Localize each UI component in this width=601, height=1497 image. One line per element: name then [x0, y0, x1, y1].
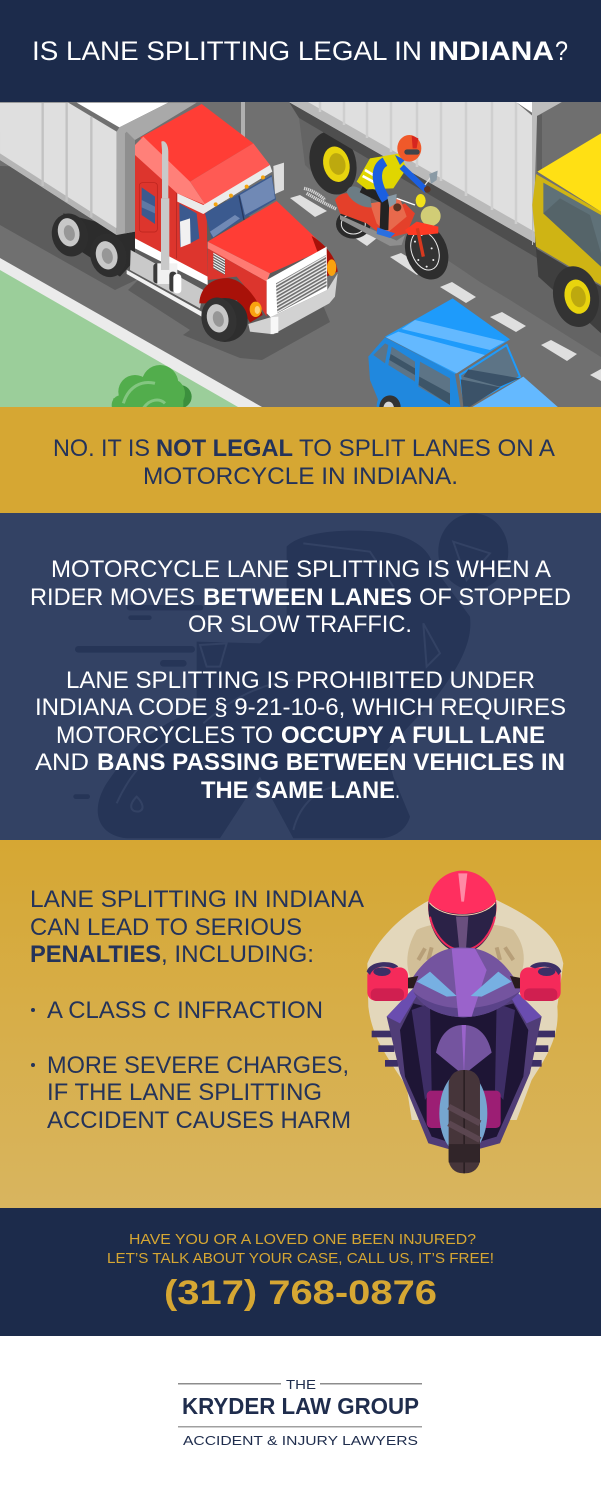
- call to action text: [107, 1232, 494, 1267]
- title: INDIANA: [429, 36, 554, 66]
- door window and mirrors: [179, 203, 199, 247]
- logo: The Kryder Law Group: [178, 1377, 422, 1448]
- icon: bush: [112, 365, 192, 407]
- exhaust smoke: [304, 188, 337, 209]
- explanation paragraph two: LANE SPLITTING IS PROHIBITED UNDER: [66, 667, 535, 694]
- explanation paragraph one: BETWEEN LANES: [203, 584, 412, 611]
- title: ?: [555, 36, 568, 66]
- shadows on road: [0, 118, 601, 360]
- exhaust stack: [161, 141, 169, 270]
- right fender: [312, 236, 338, 277]
- hood: [208, 201, 327, 273]
- call to action text: HAVE YOU OR A LOVED ONE BEEN INJURED?: [129, 1232, 476, 1248]
- cab side: [135, 145, 208, 283]
- explanation paragraph two: BANS PASSING BETWEEN VEHICLES IN: [97, 749, 565, 776]
- explanation paragraph two: .: [395, 777, 400, 804]
- penalties intro text: [30, 886, 364, 968]
- penalties intro text: PENALTIES: [30, 941, 161, 968]
- bullet: class C infraction: A CLASS C INFRACTION: [47, 997, 323, 1024]
- penalties intro text: LANE SPLITTING IN INDIANA: [30, 886, 364, 913]
- motorcycle rider: [304, 135, 456, 286]
- explanation paragraph two: MOTORCYCLES TO: [56, 722, 273, 749]
- answer text: NOT LEGAL: [156, 435, 293, 462]
- penalties intro text: CAN LEAD TO SERIOUS: [30, 914, 302, 941]
- explanation paragraph two: OCCUPY A FULL LANE: [281, 722, 545, 749]
- explanation paragraph one: [30, 556, 571, 638]
- right trailer: [289, 102, 562, 258]
- explanation paragraph one: OF STOPPED: [419, 584, 571, 611]
- front fender and wheel: [199, 278, 263, 323]
- front wheel: [404, 232, 448, 280]
- answer text: MOTORCYCLE IN INDIANA.: [143, 463, 458, 490]
- road lane dashes: [290, 195, 601, 381]
- bullet: more severe charges: [31, 1052, 351, 1134]
- left trailer: [0, 103, 197, 281]
- blue car: [368, 298, 558, 407]
- yellow truck: [532, 133, 601, 333]
- answer panel: [0, 407, 601, 513]
- bullet: more severe charges: ACCIDENT CAUSES HARM: [47, 1107, 351, 1134]
- watermark motorcycle: [73, 513, 508, 838]
- explanation paragraph two: THE SAME LANE: [201, 777, 395, 804]
- logo: The Kryder Law Group: THE: [286, 1377, 316, 1392]
- bullet: more severe charges: IF THE LANE SPLITTING: [47, 1079, 322, 1106]
- illustration: traffic scene with truck, motorcycle and car: [0, 102, 601, 421]
- logo: The Kryder Law Group: KRYDER LAW GROUP: [182, 1393, 419, 1419]
- answer text: NO. IT IS: [53, 435, 150, 462]
- call to action panel: [0, 1208, 601, 1336]
- illustration: rider on sport motorcycle: [367, 871, 563, 1173]
- bumper: [248, 273, 338, 334]
- background post: [241, 102, 245, 138]
- rider body: [362, 188, 385, 230]
- answer text: [53, 435, 555, 490]
- answer text: TO SPLIT LANES ON A: [299, 435, 555, 462]
- title: IS LANE SPLITTING LEGAL IN: [32, 36, 422, 66]
- explanation panel: [0, 513, 601, 840]
- explanation paragraph one: OR SLOW TRAFFIC.: [188, 611, 412, 638]
- header panel: [0, 0, 601, 102]
- penalties panel: [0, 840, 601, 1208]
- cab roof: [140, 104, 253, 182]
- explanation paragraph two: AND: [35, 749, 89, 776]
- explanation paragraph one: RIDER MOVES: [30, 584, 195, 611]
- explanation paragraph two: [35, 667, 566, 804]
- grass and curb: [0, 258, 262, 407]
- call to action text: LET’S TALK ABOUT YOUR CASE, CALL US, IT’S FREE!: [107, 1251, 494, 1267]
- windshield: [205, 175, 276, 238]
- red semi truck: [0, 103, 338, 345]
- grille: [267, 247, 327, 317]
- logo: The Kryder Law Group: ACCIDENT & INJURY LAWYERS: [183, 1433, 418, 1448]
- explanation paragraph one: MOTORCYCLE LANE SPLITTING IS WHEN A: [51, 556, 551, 583]
- bullet: more severe charges: MORE SEVERE CHARGES,: [47, 1052, 349, 1079]
- penalties intro text: , INCLUDING:: [161, 941, 314, 968]
- explanation paragraph two: INDIANA CODE § 9-21-10-6, WHICH REQUIRES: [35, 694, 566, 721]
- phone number: (317) 768-0876: [164, 1274, 437, 1312]
